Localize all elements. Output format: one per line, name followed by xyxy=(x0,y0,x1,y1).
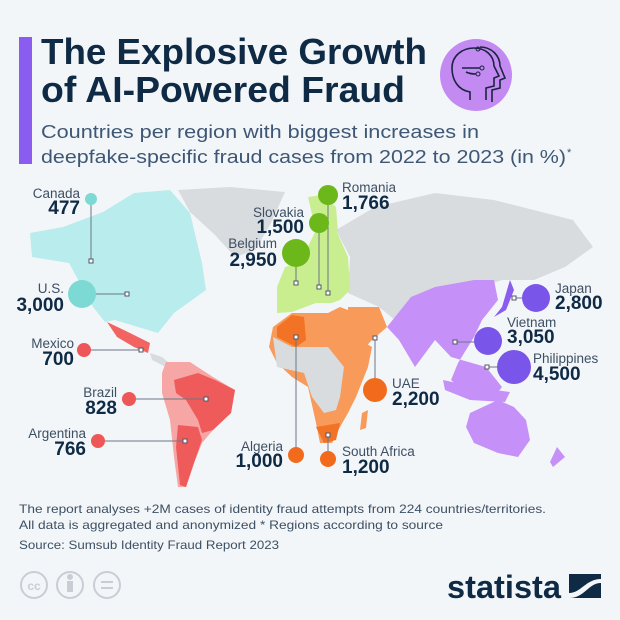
labels: Philippines xyxy=(533,351,599,366)
labels: 700 xyxy=(42,349,74,370)
labels: U.S. xyxy=(38,281,64,296)
subtitle: Countries per region with biggest increases in xyxy=(41,122,479,142)
title: The Explosive Growth xyxy=(41,31,427,72)
labels: 1,200 xyxy=(342,457,390,478)
map xyxy=(30,187,593,487)
labels: 1,766 xyxy=(342,193,390,214)
license icons: cc xyxy=(27,579,41,593)
labels: 2,800 xyxy=(555,293,603,314)
labels: Romania xyxy=(342,180,397,195)
labels: 3,050 xyxy=(507,327,555,348)
labels: 4,500 xyxy=(533,364,581,385)
subtitle xyxy=(41,122,572,167)
labels: 2,950 xyxy=(229,250,277,271)
footer notes: All data is aggregated and anonymized * Regions according to source xyxy=(19,518,443,532)
labels: 828 xyxy=(85,398,117,419)
labels: 1,000 xyxy=(235,451,283,472)
labels: South Africa xyxy=(342,444,415,459)
connector lines xyxy=(82,195,536,459)
subtitle: deepfake-specific fraud cases from 2022 to 2023 (in %) xyxy=(41,147,566,167)
labels: 477 xyxy=(48,198,80,219)
labels: Algeria xyxy=(241,439,283,454)
labels: Belgium xyxy=(228,236,277,251)
labels: UAE xyxy=(392,376,420,391)
labels: Brazil xyxy=(83,385,117,400)
footer notes xyxy=(19,502,546,552)
license icons xyxy=(21,572,120,598)
footer notes: Source: Sumsub Identity Fraud Report 2023 xyxy=(19,538,279,552)
bubbles xyxy=(68,185,550,467)
subtitle: * xyxy=(567,147,572,159)
title: of AI-Powered Fraud xyxy=(41,69,405,110)
labels: Slovakia xyxy=(253,205,304,220)
labels: Japan xyxy=(555,281,592,296)
labels: 1,500 xyxy=(256,217,304,238)
labels: Argentina xyxy=(28,426,86,441)
labels: Canada xyxy=(33,186,80,201)
footer notes: The report analyses +2M cases of identity fraud attempts from 224 countries/territories. xyxy=(19,502,546,516)
labels: 766 xyxy=(54,439,86,460)
labels xyxy=(16,180,603,478)
accent bar xyxy=(19,37,32,164)
labels: Vietnam xyxy=(507,315,556,330)
labels: Mexico xyxy=(31,336,74,351)
icon: AI head xyxy=(440,39,512,111)
title xyxy=(41,31,427,110)
labels: 2,200 xyxy=(392,389,440,410)
statista logo: statista xyxy=(447,569,561,605)
labels: 3,000 xyxy=(16,295,64,316)
